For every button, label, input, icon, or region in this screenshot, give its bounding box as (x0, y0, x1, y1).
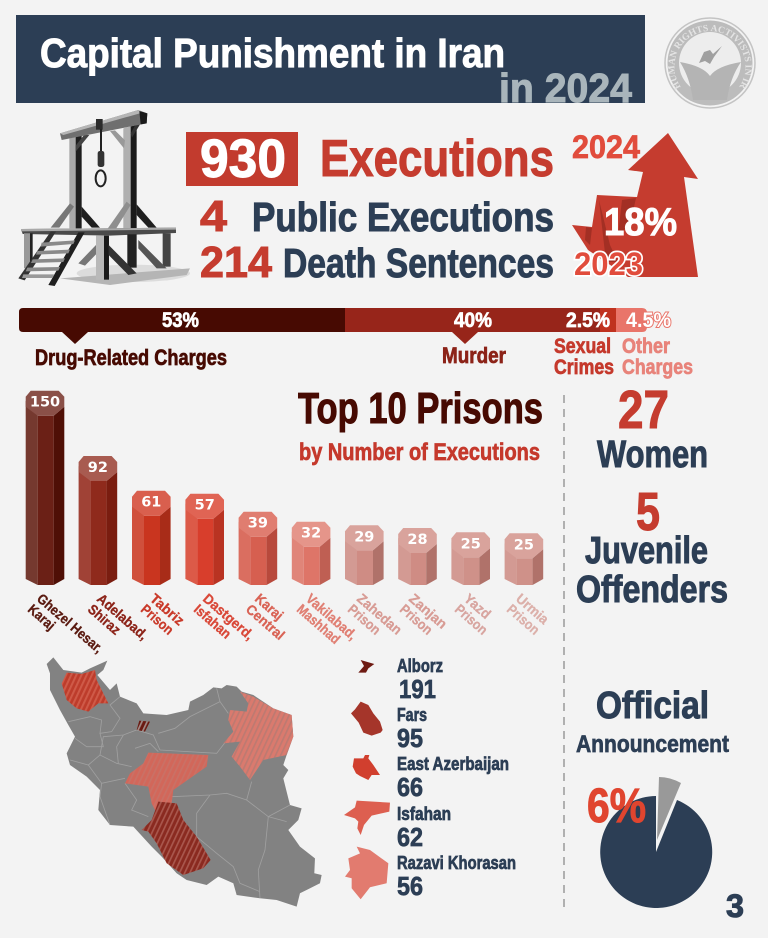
stacked bar: execution charges: 2.5% (566, 309, 610, 332)
stat: 5 juvenile offenders: Offenders (576, 569, 728, 611)
label: murder: Murder (442, 343, 506, 368)
bar: Ghezel Hesar 150 (26, 391, 64, 585)
axis labels: prison names: Prison (452, 601, 491, 638)
bar: Tabriz 61 (132, 491, 171, 585)
bar: Zanjan 28: 28 (407, 532, 428, 548)
heading: official announcement (576, 685, 729, 758)
arrow: 18% rise 2023 to 2024: 2023 (574, 246, 643, 282)
bar: Yazd 25: 25 (461, 536, 481, 552)
bar: Adelabad 92 (79, 456, 117, 585)
legend item: East Azerbaijan 66 (397, 754, 509, 802)
axis labels: prison names: Vakilabad, (303, 590, 360, 643)
axis labels: prison names: Shiraz (85, 601, 124, 638)
axis labels: prison names: Urmia (513, 590, 552, 627)
pie chart: 6% official announcements: 6% (587, 780, 646, 833)
stat: 27 women: 27 (618, 380, 669, 440)
stat: 214 death sentences (200, 238, 554, 287)
stat: 27 women (597, 380, 708, 476)
legend item: Alborz 191: 191 (399, 674, 436, 704)
heading: top 10 prisons: by Number of Executions (299, 439, 540, 466)
bar: Zanjan 28 (398, 528, 437, 585)
bar: Yazd 25 (451, 532, 490, 585)
title banner: Capital Punishment in Iran (40, 30, 505, 76)
label: sexual crimes: Sexual (554, 335, 611, 358)
icon: East Azerbaijan (353, 755, 380, 780)
chart: executions by prison (25, 391, 552, 667)
illustration: gallows (18, 110, 190, 286)
bar: Adelabad 92: 92 (88, 460, 108, 476)
stat: 214 death sentences: Death Sentences (283, 240, 554, 286)
arrow: 18% rise 2023 to 2024 (572, 129, 698, 282)
legend item: Alborz 191: Alborz (397, 656, 443, 676)
bar: Tabriz 61: 61 (141, 495, 161, 511)
stat: 930 executions: 930 (200, 129, 286, 189)
axis labels: prison names: Ghezel Hesar, (34, 590, 106, 656)
axis labels: prison names: Dastgerd, (200, 590, 257, 643)
map legend: provinces (344, 656, 516, 901)
legend item: Razavi Khorasan 56: 56 (397, 871, 423, 901)
logo: Human Rights Activists in Iran (664, 17, 756, 109)
legend item: Razavi Khorasan 56: Razavi Khorasan (397, 853, 516, 873)
stat: 5 juvenile offenders (576, 482, 728, 611)
axis labels: prison names: Prison (504, 601, 543, 638)
label: sexual crimes: Crimes (554, 356, 614, 379)
bar: Vakilabad 32 (292, 522, 330, 585)
stacked bar: execution charges (19, 308, 693, 379)
axis labels: prison names: Adelabad, (94, 590, 151, 643)
legend item: Fars 95: Fars (397, 705, 427, 725)
bar: Urmia 25 (505, 533, 543, 585)
axis labels: prison names: Prison (345, 601, 384, 638)
axis labels: prison names: Zanjan (406, 590, 450, 632)
bar: Karaj Central 39 (239, 512, 277, 585)
stat: 930 executions (186, 129, 554, 189)
heading: top 10 prisons (298, 384, 543, 466)
icon: Isfahan (344, 801, 390, 835)
axis labels: prison names: Yazd (461, 590, 494, 622)
axis labels: prison names: Tabriz (147, 590, 188, 629)
stat: 4 public executions: 4 (200, 192, 228, 241)
legend item: Alborz 191 (397, 656, 443, 704)
stat: 930 executions: Executions (320, 130, 554, 188)
label: drug-related charges: Drug-Related Charges (35, 345, 227, 370)
legend item: Isfahan 62 (397, 804, 451, 852)
headline stats (186, 129, 554, 287)
bar: Dastgerd 57: 57 (195, 498, 215, 514)
axis labels: prison names: Prison (138, 601, 177, 638)
heading: top 10 prisons: Top 10 Prisons (298, 384, 543, 433)
region: Alborz (137, 721, 150, 732)
icon: Alborz (358, 660, 374, 673)
legend item: Isfahan 62: 62 (397, 822, 423, 852)
stat: 5 juvenile offenders: 5 (636, 482, 660, 542)
label: other charges: Other (622, 335, 670, 358)
arrow: 18% rise 2023 to 2024: 18% (604, 201, 677, 244)
label: other charges: Charges (622, 356, 693, 379)
arrow: 18% rise 2023 to 2024: 2024 (572, 129, 640, 165)
bar: Zahedan 29 (345, 525, 384, 585)
bar: Karaj Central 39: 39 (248, 516, 268, 532)
heading: official announcement: Announcement (576, 731, 729, 758)
bar: Vakilabad 32: 32 (301, 526, 321, 542)
label: other charges (622, 335, 693, 379)
icon: Fars (351, 702, 383, 736)
map of Iran by province (47, 657, 322, 907)
bar: Urmia 25: 25 (514, 537, 534, 553)
bar: Dastgerd 57 (185, 494, 224, 585)
axis labels: prison names: Zahedan (354, 590, 405, 638)
axis labels: prison names: Isfahan (191, 601, 235, 642)
stacked bar: execution charges: 53% (162, 309, 199, 332)
legend item: Fars 95: 95 (397, 723, 423, 753)
stacked bar: execution charges: 4.5% (626, 309, 671, 332)
stat: 214 death sentences: 214 (200, 238, 273, 287)
stat: 5 juvenile offenders: Juvenile (585, 530, 708, 572)
legend item: Isfahan 62: Isfahan (397, 804, 451, 824)
stat: 4 public executions: Public Executions (252, 194, 554, 240)
axis labels: prison names: Mashhad (294, 601, 344, 647)
region: Fars (142, 802, 211, 875)
legend item: East Azerbaijan 66: East Azerbaijan (397, 754, 509, 774)
stat: 27 women: Women (597, 434, 708, 476)
title banner: in 2024 (499, 65, 632, 111)
region: Razavi Khorasan (223, 692, 293, 780)
legend item: Fars 95 (397, 705, 427, 753)
axis labels: prison names: Karaj (252, 590, 287, 623)
axis labels: prison names: Karaj (25, 601, 59, 633)
page number: 3 (726, 888, 744, 924)
title banner (16, 15, 645, 111)
region: Isfahan (125, 753, 208, 813)
stacked bar: execution charges: 40% (454, 309, 492, 332)
bar: Ghezel Hesar 150: 150 (30, 395, 60, 411)
label: sexual crimes (554, 335, 614, 379)
axis labels: prison names: Prison (397, 601, 436, 638)
pie chart: 6% official announcements (587, 777, 712, 908)
region: East Azerbaijan (62, 670, 108, 712)
axis labels: prison names: Central (243, 601, 288, 643)
bar: Zahedan 29: 29 (354, 529, 374, 545)
icon: Razavi Khorasan (345, 847, 388, 899)
heading: official announcement: Official (596, 685, 709, 727)
axis labels: prison names (25, 590, 552, 667)
legend item: East Azerbaijan 66: 66 (397, 772, 423, 802)
legend item: Razavi Khorasan 56 (397, 853, 516, 901)
